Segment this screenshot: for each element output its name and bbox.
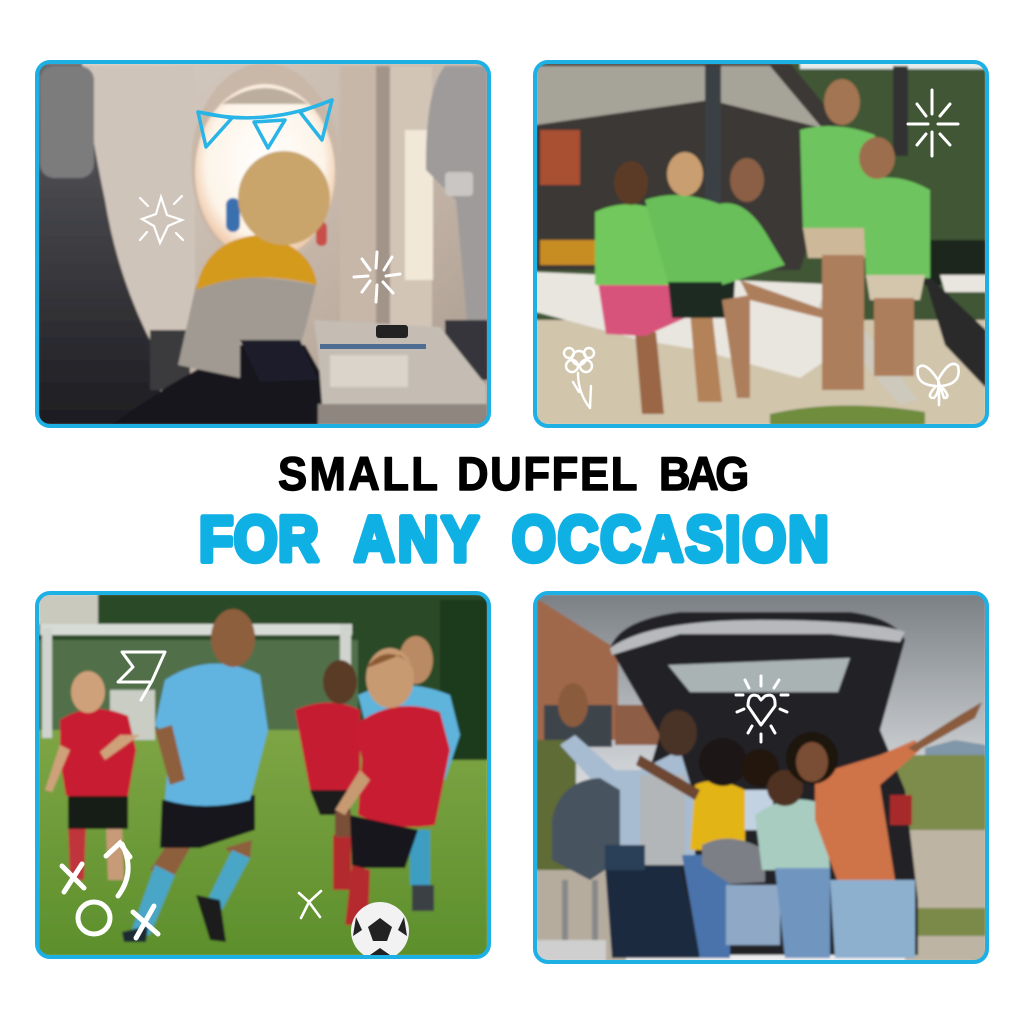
window bbox=[191, 64, 327, 205]
icon: flower bbox=[564, 348, 594, 408]
left seat bbox=[38, 63, 165, 425]
panel: soccer photo bbox=[38, 594, 488, 960]
icon: heart burst bbox=[736, 676, 788, 742]
icon: burst bbox=[354, 252, 400, 302]
kids bbox=[635, 332, 664, 414]
icon: burst white bbox=[908, 90, 958, 156]
icon: sparkle star bbox=[140, 196, 183, 243]
soccer ball bbox=[351, 902, 409, 960]
building bbox=[536, 63, 845, 270]
panel: family car photo bbox=[536, 594, 986, 961]
panel: beach camp photo bbox=[536, 63, 986, 425]
boy bbox=[755, 799, 830, 870]
front boy red bbox=[355, 706, 450, 827]
icon: flag bbox=[118, 652, 165, 700]
child bbox=[134, 344, 324, 424]
tray table bbox=[314, 320, 486, 404]
small girl bbox=[726, 885, 780, 945]
heading: small duffel bag: BAG bbox=[659, 448, 749, 500]
icon: bunting bbox=[198, 100, 332, 148]
girl yellow bbox=[690, 781, 745, 850]
heading: for any occasion bbox=[199, 503, 829, 575]
back boy blue bbox=[358, 685, 460, 780]
sand bbox=[536, 320, 986, 425]
heading: for any occasion: FOR bbox=[199, 503, 319, 575]
heading: small duffel bag: DUFFEL bbox=[457, 448, 637, 500]
kayak bbox=[536, 272, 850, 378]
icon: small star bbox=[299, 891, 321, 918]
heading: for any occasion: ANY bbox=[354, 503, 479, 575]
backpack bbox=[552, 778, 620, 880]
back girl bbox=[295, 702, 360, 790]
brick building bbox=[536, 598, 618, 740]
right seat bbox=[424, 65, 487, 321]
heading: small duffel bag: SMALL bbox=[278, 448, 438, 500]
panel: airplane photo bbox=[38, 63, 488, 425]
icon: butterfly bbox=[918, 364, 959, 405]
heading: small duffel bag bbox=[278, 448, 749, 500]
woman bbox=[815, 740, 920, 888]
icon: play diagram bbox=[62, 843, 158, 938]
heading: for any occasion: OCCASION bbox=[512, 503, 829, 575]
man bbox=[558, 734, 697, 857]
car bbox=[610, 612, 918, 955]
boy blue bbox=[150, 846, 190, 876]
left girl bbox=[68, 825, 86, 880]
